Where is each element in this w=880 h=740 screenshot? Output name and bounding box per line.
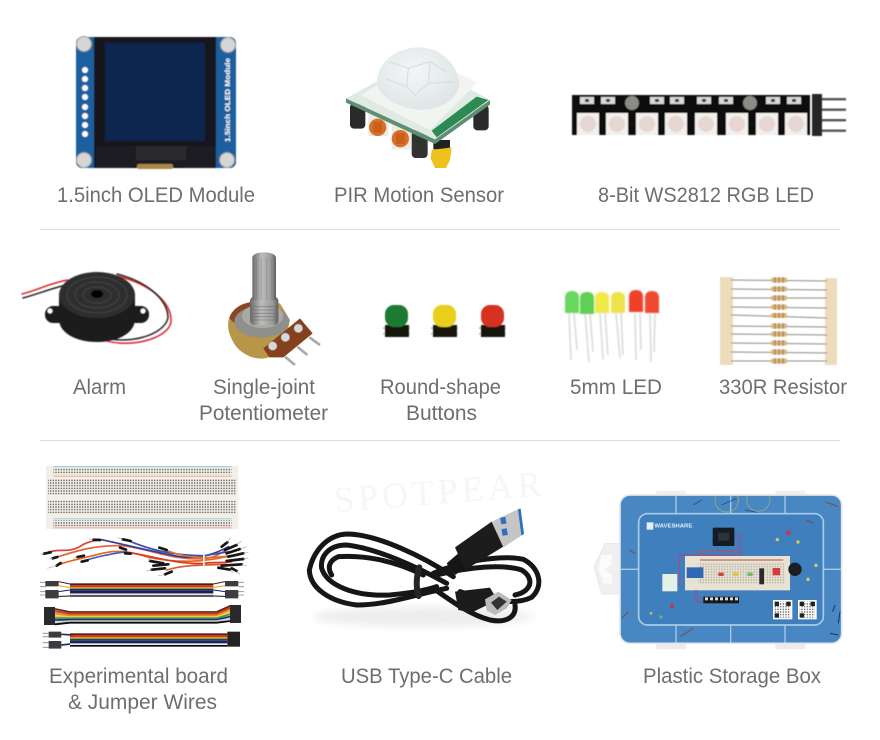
label: Single-joint [213, 376, 315, 399]
icon: OLED module [76, 36, 236, 169]
loose jumper wires [41, 538, 248, 576]
icon: breadboard and jumper wires [40, 466, 248, 649]
label [199, 376, 328, 425]
panel: 1.5inch OLED Module [57, 36, 255, 207]
icon: six LEDs [565, 290, 659, 362]
label: Alarm [73, 376, 126, 399]
icon: PIR sensor [346, 47, 490, 168]
label: USB Type-C Cable [341, 665, 512, 688]
ribbon cable 1 [40, 581, 244, 598]
hanging tab and latches [594, 491, 805, 649]
icon: USB cable [309, 508, 539, 627]
breadboard [46, 466, 238, 529]
icon: alarm buzzer [22, 272, 171, 343]
logo [647, 522, 693, 530]
panel: 8-Bit WS2812 RGB LED [572, 94, 846, 207]
icon: storage box [594, 491, 842, 649]
divider lines [40, 230, 840, 440]
label: 330R Resistor [719, 376, 847, 399]
icon: three push buttons [383, 305, 506, 337]
label: 5mm LED [570, 376, 662, 399]
ribbon cable 3 [43, 632, 240, 649]
icon: potentiometer [228, 252, 320, 365]
panel: Round-shape Buttons [380, 305, 506, 425]
label: Plastic Storage Box [643, 665, 821, 688]
label: Experimental board [49, 665, 228, 688]
panel: PIR Motion Sensor [334, 47, 504, 207]
label: Round-shape [380, 376, 501, 399]
panel: Experimental board and Jumper Wires [40, 466, 248, 714]
label: PIR Motion Sensor [334, 184, 504, 207]
ribbon cable 2 [44, 605, 241, 625]
icon: OLED module: 1.5inch OLED Module [223, 58, 232, 142]
panel: Plastic Storage Box [594, 491, 842, 688]
label [49, 665, 228, 714]
logo: WAVESHARE [654, 523, 693, 529]
panel: Alarm [22, 272, 171, 399]
panel: USB Type-C Cable [309, 464, 543, 688]
panel: 330R Resistor [719, 277, 847, 399]
panel: Single-joint Potentiometer [199, 252, 328, 425]
label [380, 376, 501, 425]
label: Buttons [406, 402, 477, 425]
label: 8-Bit WS2812 RGB LED [598, 184, 814, 207]
label: Potentiometer [199, 402, 328, 425]
icon: resistor strip [720, 277, 837, 365]
panel: 5mm LED [565, 290, 662, 399]
icon: LED strip [572, 94, 846, 136]
watermark: SPOTPEAR [332, 464, 543, 520]
label: 1.5inch OLED Module [57, 184, 255, 207]
label: & Jumper Wires [68, 691, 217, 714]
QR codes [773, 600, 817, 619]
